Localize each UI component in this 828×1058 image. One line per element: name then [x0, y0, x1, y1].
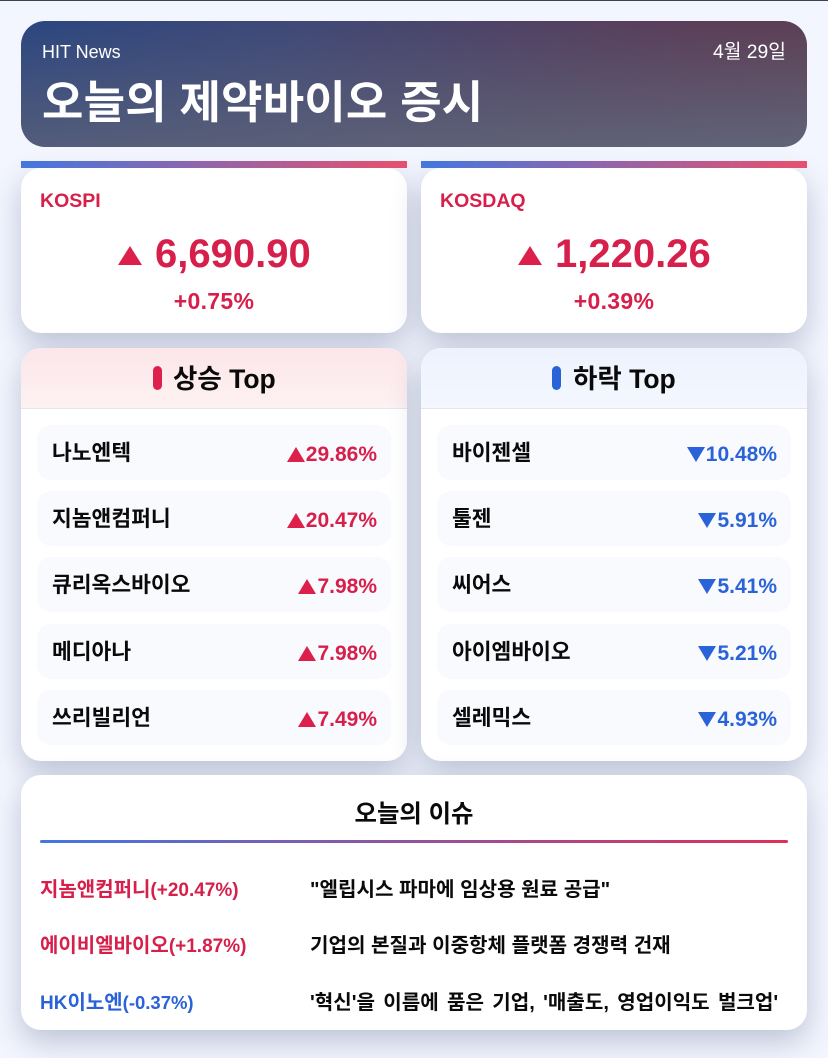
- issue 3: [40, 992, 778, 1014]
- row 4: 아이엠바이오: [452, 640, 571, 664]
- row 1: [37, 425, 391, 480]
- losers heading: 하락 Top: [573, 364, 676, 394]
- row 2: 20.47%: [306, 509, 377, 532]
- row 5: 쓰리빌리언: [52, 706, 151, 730]
- issue 1: 지놈앤컴퍼니(+20.47%): [40, 879, 239, 901]
- row 3: 7.98%: [317, 575, 377, 598]
- panel: KOSPI: [21, 168, 407, 333]
- row 5: 셀레믹스: [452, 706, 531, 730]
- row 5: 7.49%: [317, 708, 377, 731]
- gainers heading: 상승 Top: [173, 364, 276, 394]
- losers heading: [421, 348, 807, 409]
- panel: losers: [421, 348, 807, 761]
- row 1: [437, 425, 791, 480]
- row 3: 큐리옥스바이오: [52, 573, 190, 597]
- heading underline: [40, 840, 788, 842]
- index name: KOSPI: [40, 190, 101, 212]
- row 1: 바이젠셀: [452, 441, 531, 465]
- index value with up arrow: 1,220.26: [555, 232, 711, 276]
- issue 1: "엘립시스 파마에 임상용 원료 공급": [310, 879, 610, 901]
- index name: KOSDAQ: [440, 190, 526, 212]
- row 2: [37, 491, 391, 546]
- issues heading: 오늘의 이슈: [354, 801, 473, 828]
- row 3: 5.41%: [717, 575, 777, 598]
- issue 2: 에이비엘바이오(+1.87%): [40, 935, 246, 957]
- row 5: 4.93%: [717, 708, 777, 731]
- issue 3: HK이노엔(-0.37%): [40, 992, 194, 1014]
- header banner: [21, 21, 807, 147]
- panel: KOSDAQ: [421, 168, 807, 333]
- row 5: [37, 690, 391, 745]
- date: 4월 29일: [713, 42, 786, 63]
- issue 2: [40, 935, 671, 957]
- row 5: [437, 690, 791, 745]
- issue 3: '혁신'을 이름에 품은 기업, '매출도, 영업이익도 벌크업': [310, 992, 778, 1014]
- main title: 오늘의 제약바이오 증시: [42, 77, 483, 128]
- row 1: 29.86%: [306, 443, 377, 466]
- row 4: 7.98%: [317, 642, 377, 665]
- row 4: [437, 624, 791, 679]
- brand label: HIT News: [42, 42, 121, 62]
- row 4: [37, 624, 391, 679]
- row 2: 5.91%: [717, 509, 777, 532]
- row 1: 10.48%: [706, 443, 777, 466]
- change percent: +0.39%: [574, 288, 654, 314]
- row 3: [37, 557, 391, 612]
- row 2: 지놈앤컴퍼니: [52, 507, 171, 531]
- panel: gainers: [21, 348, 407, 761]
- row 4: 메디아나: [52, 640, 131, 664]
- index value with up arrow: 6,690.90: [155, 232, 311, 276]
- row 4: 5.21%: [717, 642, 777, 665]
- row 3: [437, 557, 791, 612]
- change percent: +0.75%: [174, 288, 254, 314]
- gradient top bar: [421, 161, 807, 168]
- row 2: 툴젠: [452, 507, 492, 531]
- gainers heading: [21, 348, 407, 409]
- row 1: 나노엔텍: [52, 441, 131, 465]
- issue 1: [40, 879, 610, 901]
- gradient top bar: [21, 161, 407, 168]
- row 3: 씨어스: [452, 573, 511, 597]
- panel: today's issues: [21, 775, 807, 1030]
- issue 2: 기업의 본질과 이중항체 플랫폼 경쟁력 건재: [310, 935, 671, 957]
- row 2: [437, 491, 791, 546]
